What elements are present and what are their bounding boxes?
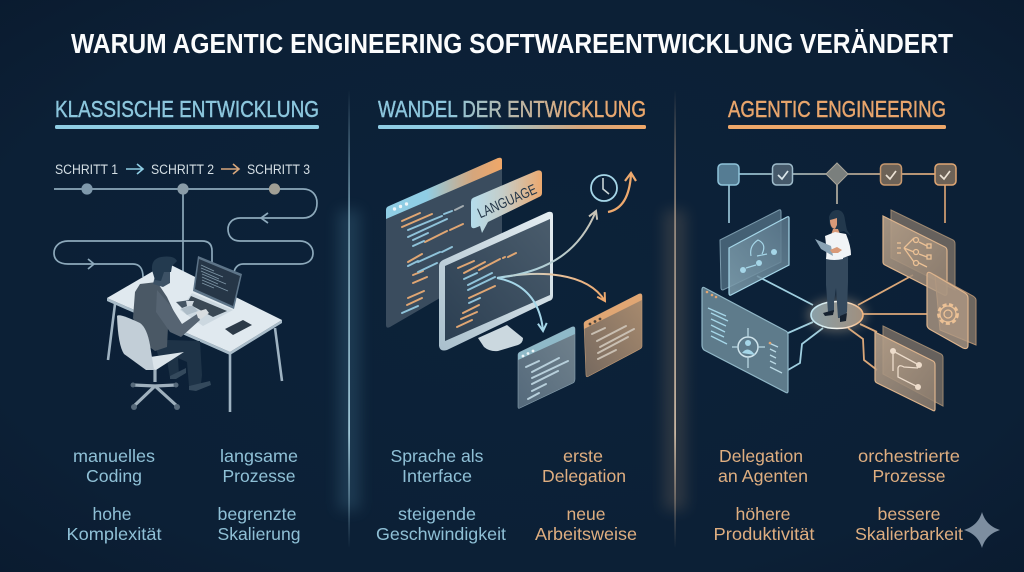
benefits: Wandel: Delegation — [542, 466, 626, 486]
window orange — [584, 294, 642, 377]
person: woman with tablet — [815, 210, 851, 322]
heading: klassische Entwicklung: KLASSISCHE ENTWICKLUNG — [55, 96, 319, 122]
benefits: Agentic Engineering: an Agenten — [718, 466, 808, 486]
step labels with arrows: SCHRITT 1 — [55, 162, 118, 177]
speech bubble: language: LANGUAGE — [475, 182, 540, 222]
step labels with arrows: SCHRITT 3 — [247, 162, 310, 177]
benefits: klassische Entwicklung: hohe — [92, 504, 132, 524]
benefits: klassische Entwicklung: langsame — [220, 446, 298, 466]
glass panel: agent dashboard — [702, 287, 788, 393]
benefits: klassische Entwicklung: Skalierung — [218, 524, 300, 544]
arrow: to clock — [497, 211, 596, 278]
step labels with arrows: SCHRITT 2 — [151, 162, 214, 177]
glass panel: gear — [927, 272, 976, 349]
benefits: Wandel: Arbeitsweise — [535, 524, 637, 544]
illustration: developer at desk — [107, 256, 282, 412]
benefits: Agentic Engineering: Produktivität — [714, 524, 815, 544]
benefits: Wandel — [376, 446, 637, 544]
phone — [225, 320, 252, 335]
benefits: klassische Entwicklung: Prozesse — [222, 466, 296, 486]
heading underline — [378, 125, 646, 129]
glass panel: loop diagram — [875, 326, 943, 411]
monitor — [439, 212, 553, 351]
chair — [117, 315, 184, 410]
panel: klassische Entwicklung — [54, 96, 319, 544]
icon: clock with arrow — [591, 173, 636, 212]
step labels with arrows — [55, 162, 310, 177]
speech bubble: language — [471, 170, 542, 233]
benefits: Agentic Engineering: bessere — [878, 504, 940, 524]
benefits: Agentic Engineering: Prozesse — [872, 466, 946, 486]
benefits: Wandel: steigende — [398, 504, 476, 524]
laptop — [180, 256, 242, 326]
benefits: Wandel: erste — [563, 446, 603, 466]
heading underline — [55, 125, 319, 129]
benefits: Wandel: neue — [566, 504, 606, 524]
heading: Wandel der Entwicklung: WANDEL DER ENTWICKLUNG — [378, 96, 646, 122]
heading: Agentic Engineering: AGENTIC ENGINEERING — [728, 96, 946, 122]
connectors — [757, 275, 927, 370]
panel: Agentic Engineering — [702, 96, 976, 544]
benefits: Wandel: Geschwindigkeit — [376, 524, 506, 544]
benefits: Agentic Engineering: orchestrierte — [858, 446, 960, 466]
window blue — [518, 327, 575, 408]
icon: sparkle — [964, 512, 1000, 548]
benefits: klassische Entwicklung — [66, 446, 300, 544]
glass panel: workflow — [720, 210, 789, 295]
person legs and torso — [133, 256, 211, 391]
benefits: klassische Entwicklung: manuelles — [73, 446, 155, 466]
benefits: Agentic Engineering: Skalierbarkeit — [855, 524, 963, 544]
person arms — [156, 290, 209, 337]
glass panel: tree diagram — [883, 210, 955, 295]
process line diagram — [54, 183, 317, 277]
benefits: klassische Entwicklung: Coding — [86, 466, 142, 486]
code window back — [386, 158, 502, 328]
arrow: to orange window — [497, 274, 605, 301]
benefits: Agentic Engineering — [714, 446, 963, 544]
benefits: klassische Entwicklung: Komplexität — [66, 524, 162, 544]
central platform — [807, 298, 867, 332]
benefits: Wandel: Interface — [402, 466, 472, 486]
panel: Wandel der Entwicklung — [376, 96, 646, 544]
benefits: Wandel: Sprache als — [390, 446, 484, 466]
benefits: Agentic Engineering: höhere — [736, 504, 790, 524]
arrow: to blue window — [497, 278, 543, 331]
benefits: klassische Entwicklung: begrenzte — [218, 504, 296, 524]
benefits: Agentic Engineering: Delegation — [719, 446, 803, 466]
heading underline — [728, 125, 946, 129]
workflow nodes — [718, 163, 956, 223]
